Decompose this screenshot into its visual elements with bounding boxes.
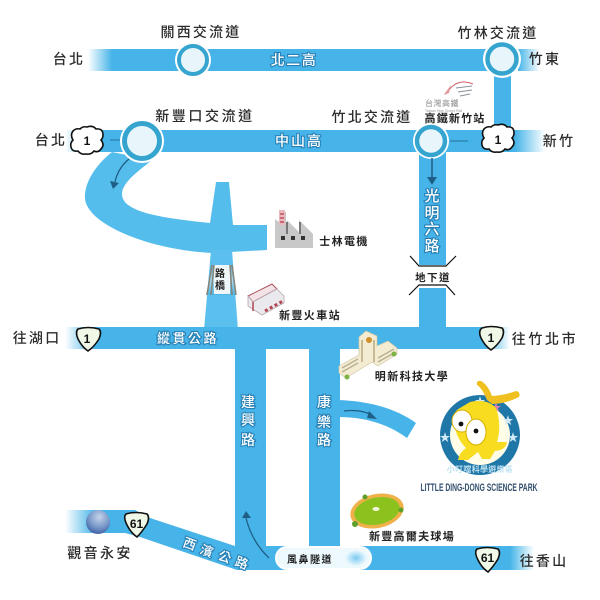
road names <box>157 52 440 572</box>
road: freeway 3 (北二高) <box>88 49 540 71</box>
road names: 公 <box>216 548 233 566</box>
road names: 明 <box>424 205 440 222</box>
overpass sign: 路橋 <box>206 265 236 295</box>
logo creature <box>452 381 520 460</box>
road names: 路 <box>424 238 440 255</box>
underpass: 地下道 <box>409 256 456 295</box>
road names: 北二高 <box>271 52 317 68</box>
interchange: 關西 <box>175 42 211 78</box>
tunnel: 風鼻隧道: 風鼻隧道 <box>287 553 333 566</box>
icon: golf course <box>347 489 407 533</box>
label: 士林電機: 士林電機 <box>319 234 369 248</box>
road names: 縱貫公路 <box>157 331 219 346</box>
arrow: 光明六路 <box>427 158 437 185</box>
road: 西濱公路 and bottom road <box>65 510 534 570</box>
labels: interchanges and destinations: 往香山 <box>520 553 568 569</box>
shield: 1 west 縱貫 <box>76 328 100 351</box>
road names: 路 <box>241 432 255 448</box>
road names: 建 <box>241 394 255 410</box>
road names: 西 <box>181 535 198 553</box>
shield: 1 east 縱貫 <box>480 326 504 350</box>
labels: interchanges and destinations: 新豐口交流道 <box>155 108 255 124</box>
icon: 明新科技大學 building <box>339 331 397 380</box>
arrow: 新豐口 ramp <box>110 159 129 189</box>
road: connector 竹林 to freeway 1 <box>494 70 511 135</box>
icon: 新豐火車站 <box>248 284 284 315</box>
shield: freeway 1 east: 1 <box>495 133 502 147</box>
logo ring <box>440 395 520 475</box>
logo stars: ★ <box>474 396 486 408</box>
logo: Little Ding-Dong Science Park <box>420 381 538 494</box>
icon: 高鐵 logo <box>425 82 473 113</box>
interchange: 新豐口 <box>120 119 164 163</box>
road names: 興 <box>241 412 255 428</box>
label: 新豐高爾夫球場: 新豐高爾夫球場 <box>369 529 455 543</box>
road: 康樂路 <box>309 345 340 550</box>
road names: 濱 <box>198 542 215 560</box>
labels: interchanges and destinations: 竹東 <box>529 51 561 67</box>
shield: 61 west <box>125 512 148 537</box>
road names: 六 <box>424 221 440 238</box>
arrow: to science park <box>344 410 377 419</box>
road names: 中山高 <box>275 133 323 149</box>
arrow: 建興路 <box>242 511 269 558</box>
labels: interchanges and destinations: 往竹北市 <box>512 331 578 347</box>
shield: 61 west: 61 <box>130 517 143 531</box>
shield: 61 east <box>476 548 500 572</box>
logo ring text: 小叮噹科學遊樂區 <box>447 464 513 474</box>
labels: interchanges and destinations: 觀音永安 <box>67 545 133 561</box>
shield: 61 east: 61 <box>481 551 494 565</box>
labels: interchanges and destinations: 台北 <box>53 51 85 67</box>
shield: freeway 1 west <box>71 126 103 154</box>
road names: 康 <box>317 394 331 410</box>
overpass sign: 路橋: 路 <box>215 267 225 280</box>
shield: freeway 1 west: 1 <box>84 134 91 148</box>
road: overpass 路橋 <box>204 250 238 330</box>
road names: 光 <box>424 188 440 205</box>
icon: 士林電機 factory <box>275 210 313 248</box>
road: 光明六路 <box>419 150 446 330</box>
shield: 1 west 縱貫: 1 <box>84 332 91 346</box>
logo stars <box>440 396 518 444</box>
road: 建興路 <box>235 345 266 550</box>
icon: 高鐵 logo: 台灣高鐵 <box>425 98 459 108</box>
labels: interchanges and destinations: 竹北交流道 <box>332 109 412 125</box>
logo stars: ★ <box>508 432 518 444</box>
labels: interchanges and destinations: 新竹 <box>543 133 575 149</box>
label: 高鐵新竹站: 高鐵新竹站 <box>424 111 486 125</box>
road: 縱貫公路 <box>65 327 510 349</box>
labels: interchanges and destinations: 往湖口 <box>13 330 61 346</box>
label: 新豐火車站: 新豐火車站 <box>279 308 341 322</box>
road names: 路 <box>317 432 331 448</box>
logo stars: ★ <box>440 432 450 444</box>
labels: interchanges and destinations: 竹林交流道 <box>458 25 538 41</box>
interchange: 竹北 <box>413 123 449 159</box>
underpass: 地下道: 地下道 <box>415 271 451 284</box>
road names: 樂 <box>317 414 331 430</box>
interchange: 竹林 <box>483 40 521 78</box>
station link lines <box>110 140 468 141</box>
shield: 1 east 縱貫: 1 <box>488 331 495 345</box>
logo stars: ★ <box>502 415 514 427</box>
shield: freeway 1 east <box>482 124 514 152</box>
tunnel: 風鼻隧道 <box>275 546 372 570</box>
labels: interchanges and destinations: 台北 <box>35 132 67 148</box>
overpass sign: 路橋: 橋 <box>215 279 225 292</box>
road: curved ramp from 新豐口 <box>85 152 267 253</box>
label: 明新科技大學: 明新科技大學 <box>375 369 449 383</box>
road names: 路 <box>233 554 250 572</box>
logo stars: ★ <box>490 402 502 414</box>
road: branch to science park <box>338 400 416 438</box>
road: freeway 1 (中山高) <box>65 130 545 152</box>
labels: interchanges and destinations: 關西交流道 <box>160 24 242 40</box>
icon: 高鐵 logo: Taiwan High Speed Rail <box>425 109 462 113</box>
icon: 觀音 sphere <box>86 510 110 534</box>
